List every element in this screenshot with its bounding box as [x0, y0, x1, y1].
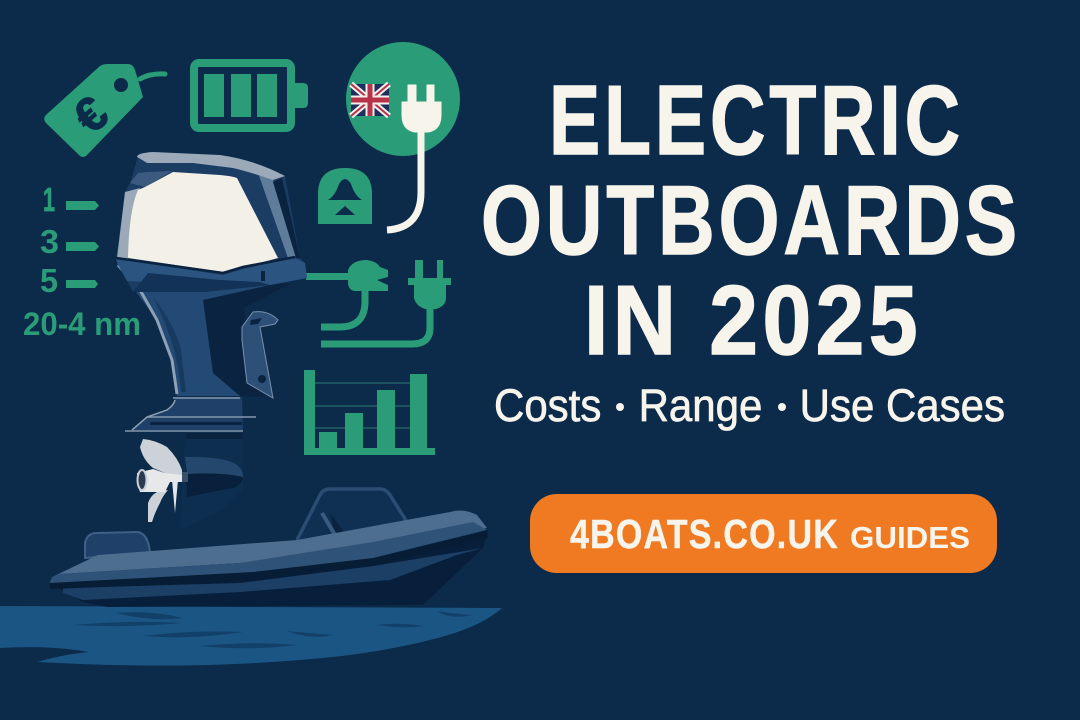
icon: green plug — [321, 260, 451, 344]
icon: price tag with euro: € — [64, 87, 119, 144]
lower unit shadow — [180, 432, 243, 530]
text: range list — [23, 181, 141, 342]
text: range list: 1 — [43, 181, 55, 218]
text: range list: 20-4 nm — [23, 306, 141, 342]
midsection leg — [118, 265, 270, 396]
heading: IN 2025 — [584, 265, 922, 375]
bar chart — [304, 370, 435, 455]
cowl collar — [116, 258, 307, 287]
boat tube — [50, 511, 487, 578]
cowl slate band — [257, 170, 296, 258]
boat black strip — [50, 530, 488, 589]
icon: white plug and cable — [387, 85, 441, 230]
icon: green arch badge — [318, 168, 372, 224]
subtitle: Costs · Range · Use Cases — [494, 380, 1005, 431]
boat hull — [50, 530, 488, 607]
icon: green plug connector — [306, 260, 388, 327]
boat mid band — [63, 548, 483, 600]
tilt bracket — [242, 312, 278, 398]
heading: ELECTRIC — [549, 65, 964, 175]
water — [0, 606, 502, 666]
boat rear seat — [85, 532, 150, 558]
boat windscreen — [297, 489, 407, 540]
icon: UK charging circle — [346, 42, 460, 230]
cowl frame — [116, 160, 307, 292]
outboard motor — [116, 152, 307, 530]
cowl grey side — [117, 188, 140, 260]
badge: 4boats guides: 4BOATS.CO.UK — [570, 511, 839, 557]
text: range list: 3 — [40, 223, 59, 260]
heading — [481, 65, 1021, 375]
cowl dark edge — [273, 178, 300, 258]
propeller — [137, 439, 188, 522]
cowl upper left shade — [130, 171, 172, 187]
leg dark recess — [203, 284, 290, 397]
gearcase — [185, 457, 243, 497]
icon: union flag — [351, 84, 389, 116]
text: range list: 5 — [40, 262, 58, 299]
boat — [50, 489, 488, 607]
badge: 4boats guides: GUIDES — [850, 520, 970, 555]
icon: battery — [194, 63, 308, 128]
badge: 4boats guides — [530, 494, 997, 573]
white cowl panel — [128, 172, 278, 272]
cowl top — [137, 152, 285, 180]
flared base — [132, 397, 243, 430]
icon: price tag with euro — [44, 64, 165, 157]
